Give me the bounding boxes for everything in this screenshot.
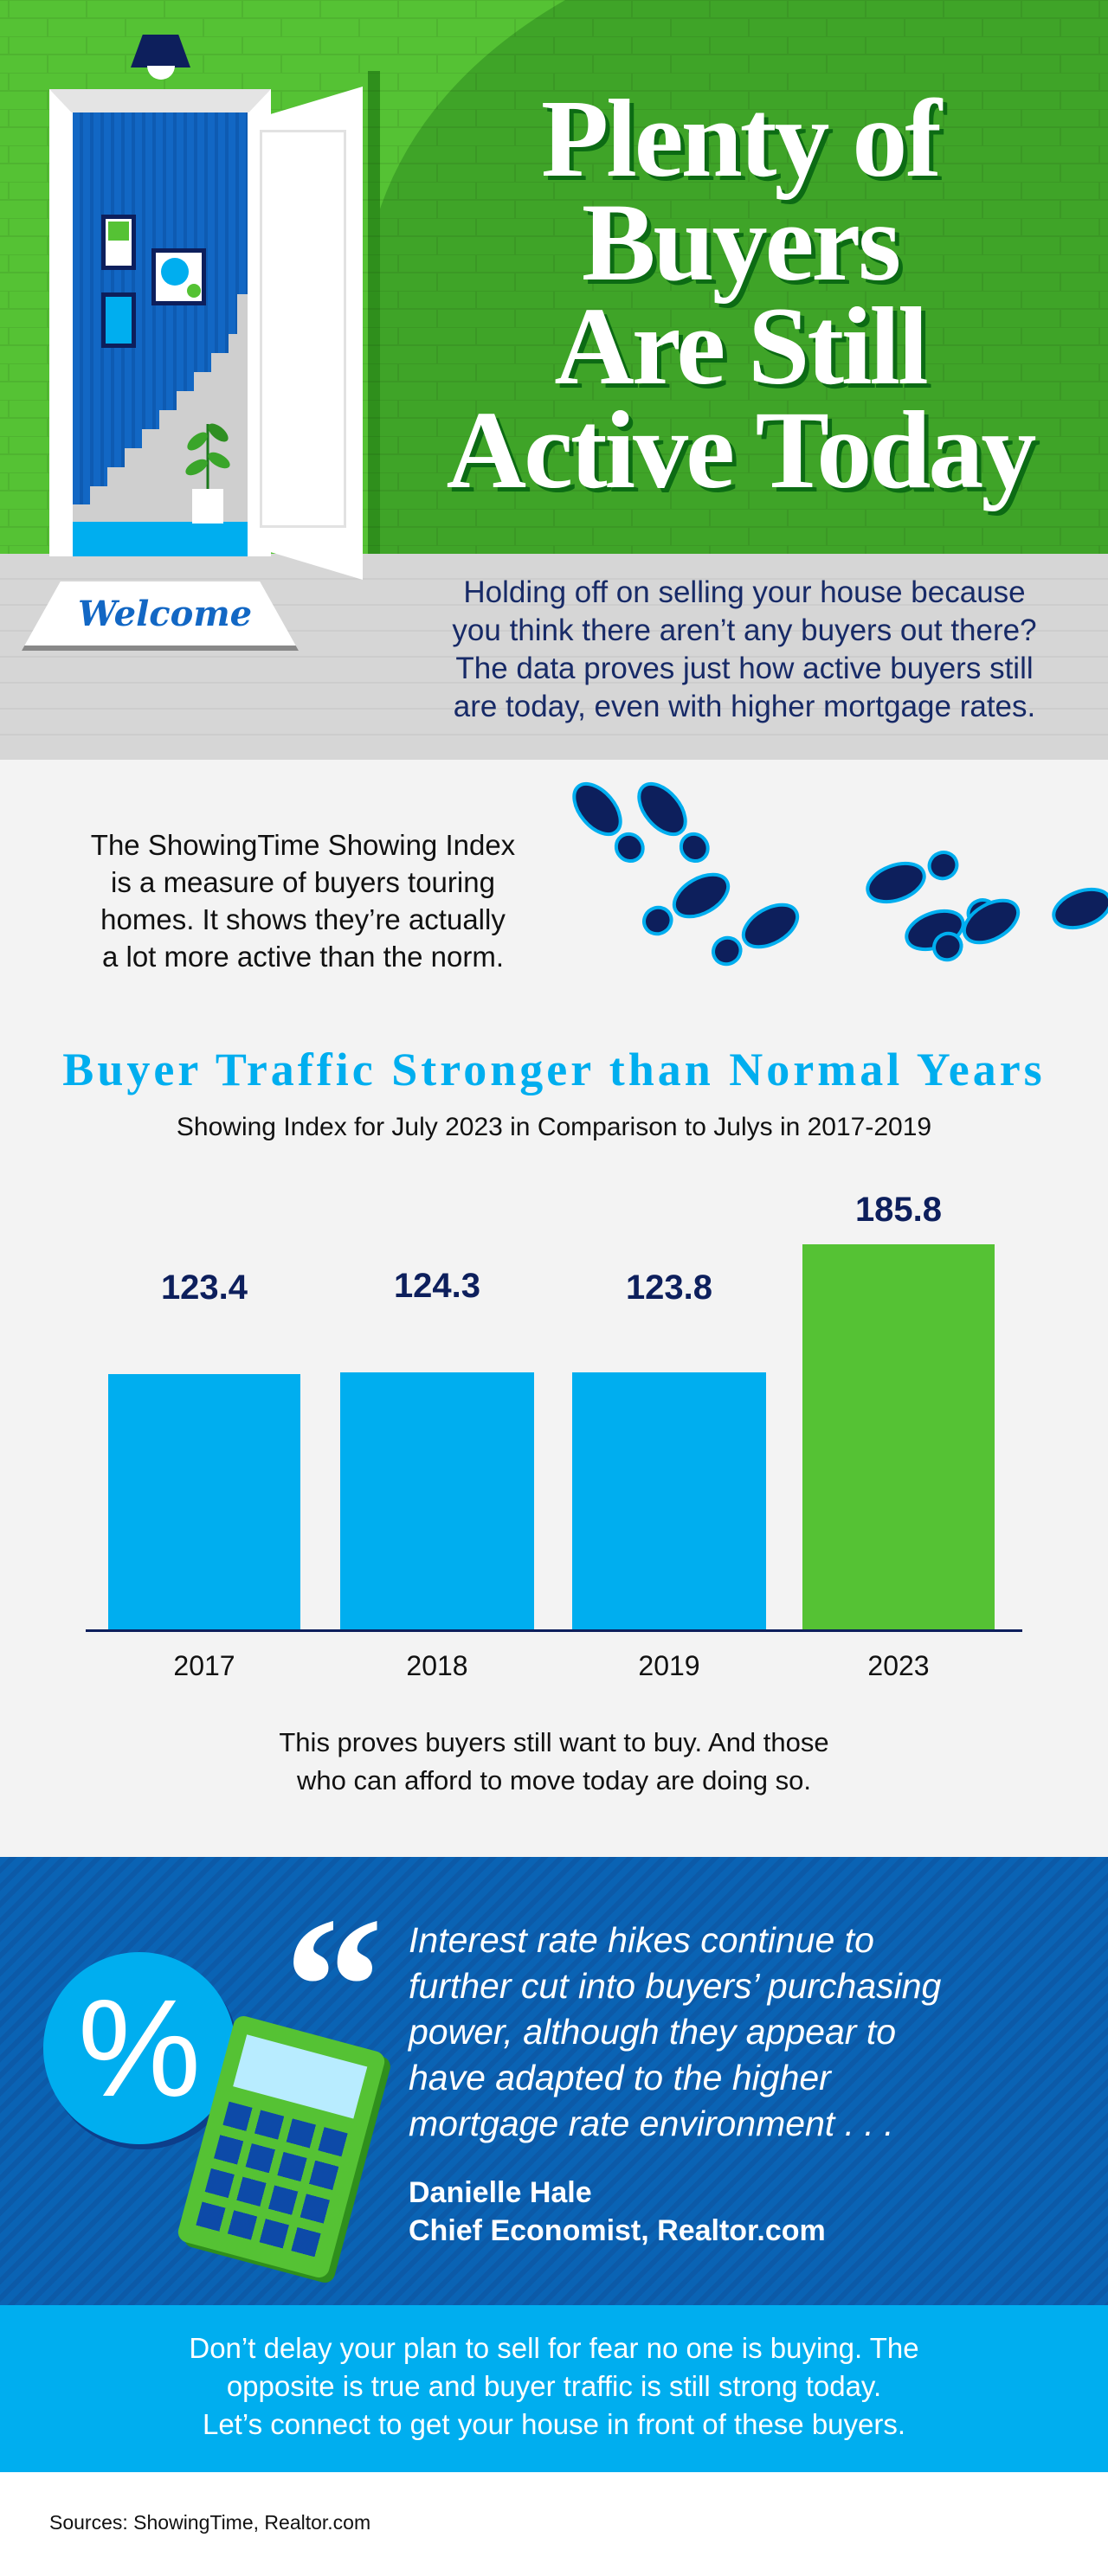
attribution	[409, 2176, 826, 2247]
showing index text: a lot more active than the norm.	[102, 941, 504, 973]
title	[447, 77, 1040, 516]
panel: call to action: opposite is true and buyer traffic is still strong today.	[227, 2370, 881, 2402]
gray section	[0, 760, 1108, 1858]
bar chart: 124.3	[394, 1267, 480, 1305]
quote text: power, although they appear to	[409, 2012, 896, 2052]
showing index text: The ShowingTime Showing Index	[91, 829, 515, 861]
showing index text	[91, 829, 515, 973]
chart title: Buyer Traffic Stronger than Normal Years	[62, 1044, 1046, 1095]
bar chart: 2023	[867, 1650, 930, 1681]
bar chart: 123.8	[626, 1269, 712, 1307]
icon: percent: %	[78, 1970, 201, 2125]
chart note: This proves buyers still want to buy. And those	[279, 1727, 829, 1757]
title: Are Still	[554, 285, 926, 408]
showing index text: homes. It shows they’re actually	[100, 903, 506, 935]
quote text	[408, 1920, 941, 2143]
title: Plenty of	[541, 77, 939, 200]
icon: calculator	[176, 2014, 387, 2280]
chart subtitle: Showing Index for July 2023 in Comparison to Julys in 2017-2019	[177, 1113, 931, 1141]
bar chart	[86, 1191, 1022, 1681]
quote text: mortgage rate environment . . .	[409, 2104, 894, 2143]
door frame	[49, 89, 271, 556]
bar chart: 2017	[173, 1650, 235, 1681]
attribution: Chief Economist, Realtor.com	[409, 2214, 826, 2247]
bar chart: 123.4	[161, 1269, 248, 1307]
quote text: Interest rate hikes continue to	[409, 1920, 874, 1960]
intro text: are today, even with higher mortgage rates.	[454, 690, 1035, 723]
bar chart: 2019	[638, 1650, 700, 1681]
panel: call to action: Let’s connect to get your house in front of these buyers.	[203, 2408, 905, 2440]
floor: gray wood	[0, 554, 1108, 760]
quote mark: “	[284, 1876, 383, 2097]
title: Active Today	[447, 389, 1034, 511]
quote text: further cut into buyers’ purchasing	[409, 1966, 941, 2006]
mat	[22, 581, 299, 651]
illustration: door: Welcome	[78, 594, 252, 634]
stairs	[73, 294, 248, 522]
chart note: who can afford to move today are doing so.	[297, 1765, 811, 1795]
title: Buyers	[582, 181, 899, 304]
header: green brick wall	[0, 0, 1108, 554]
open door	[271, 87, 363, 580]
illustration: door	[22, 35, 363, 651]
bar chart: 185.8	[855, 1191, 942, 1229]
intro text: Holding off on selling your house because	[463, 575, 1026, 609]
panel: quote	[0, 1857, 1108, 2305]
icon: percent	[43, 1952, 235, 2144]
panel: call to action: Don’t delay your plan to sell for fear no one is buying. The	[189, 2332, 919, 2364]
icon: lamp	[131, 35, 190, 67]
chart note	[279, 1727, 829, 1795]
sources: Sources: ShowingTime, Realtor.com	[49, 2511, 370, 2534]
intro text: The data proves just how active buyers still	[455, 652, 1034, 685]
quote text: have adapted to the higher	[409, 2058, 831, 2097]
bar chart: 2018	[406, 1650, 468, 1681]
showing index text: is a measure of buyers touring	[111, 866, 495, 898]
panel: call to action	[0, 2305, 1108, 2472]
plant	[185, 424, 230, 524]
intro text	[452, 575, 1037, 723]
attribution: Danielle Hale	[409, 2176, 592, 2209]
icon: footprints	[572, 782, 1108, 966]
frames	[101, 215, 136, 270]
intro text: you think there aren’t any buyers out there?	[452, 613, 1037, 647]
